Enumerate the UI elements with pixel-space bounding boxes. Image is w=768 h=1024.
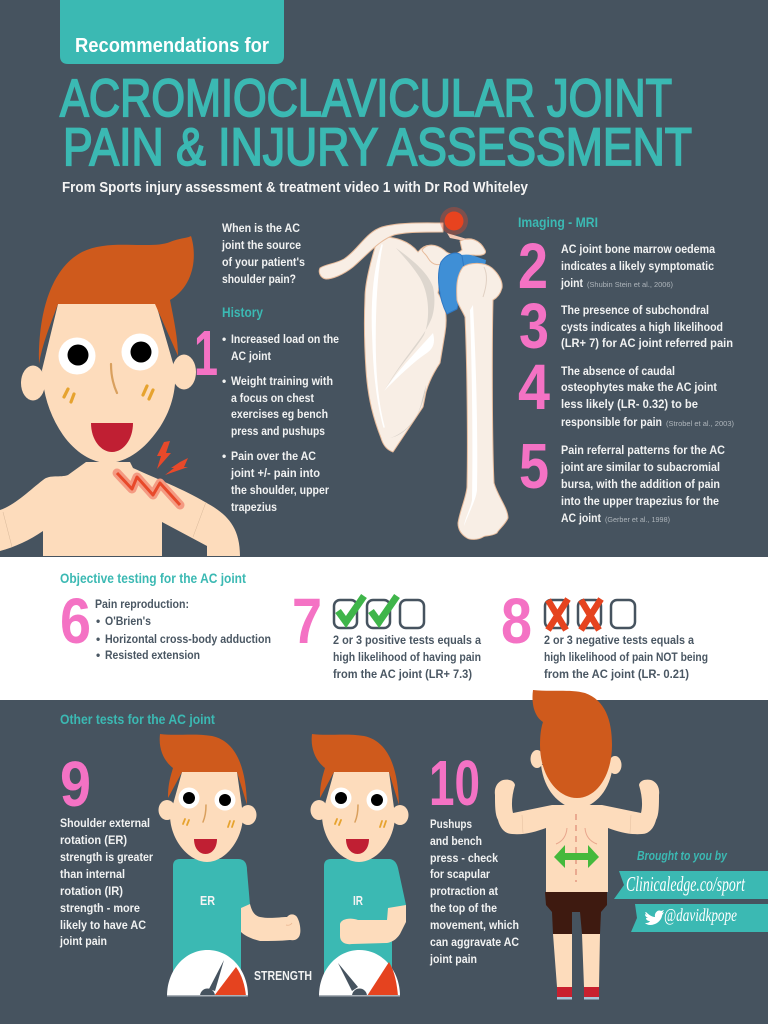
finding 5: into the upper trapezius for the bbox=[561, 494, 719, 508]
header tab bbox=[60, 0, 284, 64]
test 8: negative tests: 8 bbox=[501, 585, 532, 657]
test 6: pain reproduction bbox=[60, 585, 271, 662]
test 10: pushups: movement, which bbox=[430, 918, 519, 932]
test 7: positive tests: from the AC joint (LR+ 7.3) bbox=[333, 667, 472, 681]
finding 3: 3 bbox=[519, 290, 549, 362]
intro question bbox=[221, 221, 305, 286]
test 6: pain reproduction: • bbox=[96, 648, 100, 662]
test 10: pushups: 10 bbox=[429, 747, 480, 819]
test 6: pain reproduction: O'Brien's bbox=[105, 614, 151, 628]
test 6: pain reproduction: Resisted extension bbox=[105, 648, 200, 662]
ribbon: twitter bbox=[631, 904, 768, 932]
test 9: rotation strength: strength is greater bbox=[60, 850, 153, 864]
finding 5: 5 bbox=[519, 430, 549, 502]
gauge: ER strength bbox=[167, 950, 248, 996]
character: internal rotation: IR bbox=[353, 894, 363, 908]
credit: brought to you by: Brought to you by bbox=[637, 848, 728, 863]
history list: a focus on chest bbox=[231, 391, 314, 405]
test 9: rotation strength: 9 bbox=[60, 748, 91, 820]
test 8: negative tests bbox=[501, 585, 708, 681]
finding 2: 2 bbox=[518, 230, 548, 302]
history list: • bbox=[222, 332, 226, 346]
glowing pain point bbox=[440, 207, 468, 235]
test 6: pain reproduction: 6 bbox=[60, 585, 91, 657]
test 7: positive tests: high likelihood of having pain bbox=[333, 650, 481, 664]
test 7: positive tests: 7 bbox=[292, 585, 322, 657]
finding 3: The presence of subchondral bbox=[561, 303, 709, 317]
test 9: rotation strength: likely to have AC bbox=[60, 918, 146, 932]
icon: twitter bird bbox=[645, 910, 664, 925]
finding 4: less likely (LR- 0.32) to be bbox=[561, 397, 698, 411]
test 10: pushups: the top of the bbox=[430, 901, 497, 915]
test 7: positive tests: 2 or 3 positive tests equals a bbox=[333, 633, 481, 647]
test 8: negative tests: 2 or 3 negative tests equals a bbox=[544, 633, 694, 647]
history list: Pain over the AC bbox=[231, 449, 316, 463]
test 7: positive tests bbox=[292, 585, 481, 681]
test 10: pushups: protraction at bbox=[430, 884, 498, 898]
test 10: pushups: joint pain bbox=[429, 952, 477, 966]
finding 5: Pain referral patterns for the AC bbox=[561, 443, 725, 457]
icon: green double arrow bbox=[554, 845, 599, 868]
test 8: negative tests: from the AC joint (LR- 0.21) bbox=[544, 667, 689, 681]
finding 4: 4 bbox=[518, 351, 550, 423]
test 9: rotation strength: strength - more bbox=[60, 901, 140, 915]
test 10: pushups: press - check bbox=[430, 851, 498, 865]
character: back view bbox=[495, 690, 659, 1000]
finding 4 bbox=[518, 351, 734, 429]
test 10: pushups: Pushups bbox=[430, 817, 472, 831]
finding 2: AC joint bone marrow oedema bbox=[561, 242, 715, 256]
title bbox=[60, 69, 692, 177]
history list: AC joint bbox=[231, 349, 271, 363]
finding 4: The absence of caudal bbox=[561, 364, 675, 378]
finding 3: cysts indicates a high likelihood bbox=[561, 320, 723, 334]
finding 5: (Gerber et al., 1998) bbox=[605, 515, 670, 524]
ribbon: twitter: @davidkpope bbox=[664, 905, 737, 925]
history list: press and pushups bbox=[231, 424, 325, 438]
header tab: Recommendations for bbox=[75, 35, 269, 57]
heading: objective testing: Objective testing for the AC joint bbox=[60, 570, 246, 586]
character: front with shoulder pain bbox=[0, 236, 240, 556]
intro question: of your patient's bbox=[222, 255, 305, 269]
history list: Increased load on the bbox=[231, 332, 339, 346]
subtitle: From Sports injury assessment & treatment video 1 with Dr Rod Whiteley bbox=[62, 180, 528, 196]
test 9: rotation strength: rotation (IR) bbox=[60, 884, 123, 898]
test 6: pain reproduction: Horizontal cross-body adduction bbox=[105, 632, 271, 646]
character: external rotation: ER bbox=[200, 894, 215, 908]
test 10: pushups bbox=[429, 747, 519, 966]
label: strength: STRENGTH bbox=[254, 969, 312, 983]
finding 4: osteophytes make the AC joint bbox=[561, 380, 717, 394]
shoulder skeleton illustration bbox=[319, 207, 508, 539]
test 10: pushups: and bench bbox=[430, 834, 482, 848]
finding 3 bbox=[519, 290, 733, 362]
history list: Weight training with bbox=[231, 374, 333, 388]
finding 2: indicates a likely symptomatic bbox=[561, 259, 714, 273]
finding 4: (Strobel et al., 2003) bbox=[666, 419, 734, 428]
history list: • bbox=[222, 374, 226, 388]
heading: history: History bbox=[222, 304, 263, 320]
finding 5: joint are similar to subacromial bbox=[560, 460, 720, 474]
finding 2 bbox=[518, 230, 715, 302]
history list: • bbox=[222, 449, 226, 463]
test 10: pushups: can aggravate AC bbox=[430, 935, 519, 949]
test 9: rotation strength bbox=[59, 748, 153, 948]
history list: exercises eg bench bbox=[231, 407, 328, 421]
finding 4: responsible for pain bbox=[561, 415, 662, 429]
icon: two crossed boxes and one empty box bbox=[545, 599, 635, 630]
heading: other tests: Other tests for the AC joint bbox=[60, 711, 215, 727]
history list: the shoulder, upper bbox=[231, 483, 329, 497]
finding 5: AC joint bbox=[561, 511, 601, 525]
finding 2: joint bbox=[560, 276, 583, 290]
number 1: 1 bbox=[194, 317, 218, 389]
history list bbox=[222, 332, 339, 514]
test 6: pain reproduction: • bbox=[96, 632, 100, 646]
history list: joint +/- pain into bbox=[230, 466, 320, 480]
finding 5 bbox=[519, 430, 725, 525]
character: internal rotation bbox=[310, 734, 408, 975]
test 9: rotation strength: than internal bbox=[60, 867, 125, 881]
finding 5: bursa, with the addition of pain bbox=[561, 477, 720, 491]
character: external rotation bbox=[158, 734, 300, 975]
test 10: pushups: for scapular bbox=[430, 867, 490, 881]
intro question: shoulder pain? bbox=[222, 272, 296, 286]
test 9: rotation strength: joint pain bbox=[59, 934, 107, 948]
gauge: IR strength bbox=[319, 950, 400, 996]
intro question: When is the AC bbox=[222, 221, 300, 235]
icon: two checked boxes and one empty box bbox=[334, 596, 424, 628]
finding 2: (Shubin Stein et al., 2006) bbox=[587, 280, 673, 289]
history list: trapezius bbox=[231, 500, 277, 514]
intro question: joint the source bbox=[221, 238, 301, 252]
heading: imaging MRI: Imaging - MRI bbox=[518, 214, 598, 230]
test 9: rotation strength: Shoulder external bbox=[60, 816, 150, 830]
test 8: negative tests: high likelihood of pain NOT being bbox=[544, 650, 708, 664]
test 6: pain reproduction: Pain reproduction: bbox=[95, 597, 189, 611]
test 6: pain reproduction: • bbox=[96, 614, 100, 628]
finding 3: (LR+ 7) for AC joint referred pain bbox=[561, 336, 733, 350]
test 9: rotation strength: rotation (ER) bbox=[60, 833, 127, 847]
